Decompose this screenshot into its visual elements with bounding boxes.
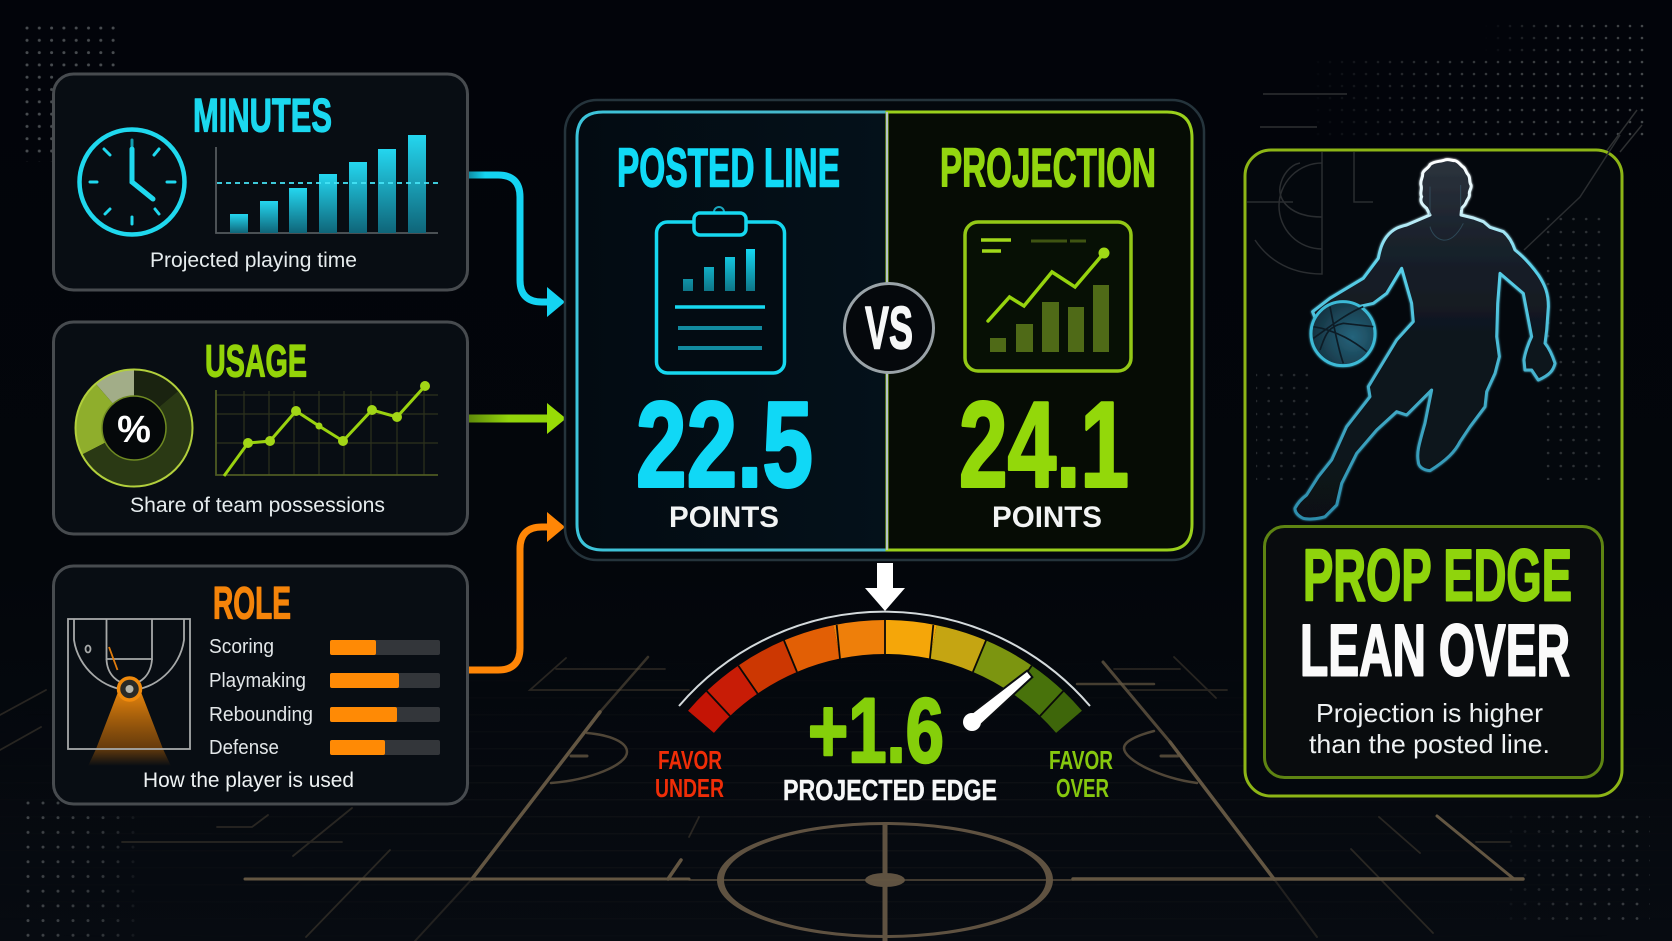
label: favor under: UNDER [655, 773, 724, 803]
caption: role: How the player is used [143, 768, 354, 792]
bar row: rebounding: Rebounding [209, 703, 313, 726]
arrow: role to center [469, 512, 565, 670]
callout: prop edge verdict [1264, 526, 1602, 778]
gauge segments [701, 637, 1069, 722]
player silhouette [1295, 160, 1555, 519]
label: favor under: FAVOR [658, 745, 722, 775]
value: edge: +1.6 [808, 680, 944, 782]
donut chart [75, 369, 193, 487]
icon: chart tablet [965, 222, 1131, 371]
heading: usage: USAGE [205, 336, 307, 386]
label: favor over: FAVOR [1049, 745, 1113, 775]
down arrow to gauge [865, 563, 905, 611]
label: points: POINTS [992, 501, 1102, 534]
label: projected edge: PROJECTED EDGE [783, 775, 997, 807]
needle [963, 672, 1031, 731]
badge: versus: VS [865, 294, 913, 362]
line chart: usage trend [216, 381, 438, 476]
heading: role: ROLE [213, 578, 291, 628]
gauge: projected edge [655, 612, 1113, 807]
bar row: defense: Defense [209, 736, 279, 759]
explanation text [1309, 698, 1550, 759]
label: favor over: OVER [1056, 773, 1109, 803]
icon: clock [80, 130, 184, 234]
panel: usage [54, 322, 468, 534]
panel: minutes [54, 74, 468, 290]
arrow: usage to center [469, 403, 566, 434]
donut chart: % [117, 409, 151, 451]
label: favor over [1049, 745, 1113, 803]
value: 22.5 points: 22.5 [636, 376, 813, 512]
explanation text: Projection is higher [1316, 698, 1543, 728]
half: projection [887, 112, 1192, 550]
badge: versus [844, 284, 934, 372]
bar row: defense [209, 736, 440, 759]
heading: minutes: MINUTES [193, 88, 332, 142]
caption: usage: Share of team possessions [130, 493, 385, 517]
label: favor under [655, 745, 724, 803]
half: posted line [577, 112, 887, 550]
icon: half court diagram [68, 619, 190, 766]
heading: posted line: POSTED LINE [617, 136, 840, 198]
bar row: scoring: Scoring [209, 635, 274, 658]
bar row: playmaking: Playmaking [209, 669, 306, 692]
label: points: POINTS [669, 501, 779, 534]
arrow: minutes to center [469, 175, 565, 317]
bar row: scoring [209, 635, 440, 658]
icon: clipboard [656, 207, 784, 373]
explanation text: than the posted line. [1309, 729, 1550, 759]
bar row: playmaking [209, 669, 440, 692]
panel: comparison [565, 100, 1204, 560]
panel: verdict [1245, 135, 1622, 796]
heading: projection: PROJECTION [940, 136, 1156, 198]
caption: minutes: Projected playing time [150, 248, 357, 272]
gauge outline arc [679, 612, 1090, 706]
bar row: rebounding [209, 703, 440, 726]
value: 24.1 points: 24.1 [959, 376, 1129, 512]
panel: role [54, 566, 468, 804]
bar chart: projected minutes [216, 135, 439, 233]
